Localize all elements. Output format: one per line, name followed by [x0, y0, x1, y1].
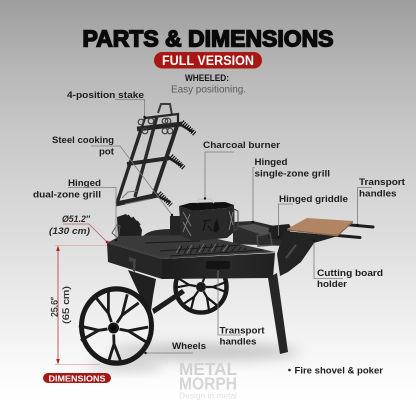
ground shadow: [87, 343, 300, 370]
height dimension: (65 cm): [60, 286, 71, 324]
label: diameter dimension: (130 cm): [49, 225, 90, 236]
badge: full version: FULL VERSION: [162, 53, 254, 68]
label: 4-position stake: [67, 89, 146, 118]
rear single-zone grill: [233, 221, 287, 246]
cutting board: [286, 218, 373, 258]
body logo: [129, 257, 136, 272]
watermark logo: METAL: [179, 359, 237, 379]
grill body: [106, 235, 275, 279]
label: hinged griddle: Hinged griddle: [279, 193, 348, 204]
front handle recess: [206, 261, 230, 269]
charcoal burner: [179, 199, 238, 241]
watermark logo: MORPH: [179, 374, 237, 394]
title: PARTS & DIMENSIONS: [82, 26, 334, 52]
label: charcoal burner: [203, 139, 280, 200]
label: hinged dual-zone grill: Hinged: [68, 177, 101, 188]
subtitle: wheeled: Easy positioning.: [171, 84, 246, 96]
label: charcoal burner: Charcoal burner: [203, 139, 280, 150]
subtitle: wheeled: [171, 73, 246, 96]
grate: [145, 241, 264, 256]
label: steel cooking pot: Steel cooking: [52, 134, 114, 145]
badge: dimensions: DIMENSIONS: [48, 374, 106, 383]
burner logo: [203, 220, 219, 232]
label: hinged dual-zone grill: [33, 177, 117, 241]
front wheel: [79, 289, 152, 364]
right leg: [268, 273, 288, 354]
label: transport handles bottom: Transport: [220, 324, 264, 335]
label: cutting board holder: holder: [317, 278, 347, 289]
label: transport handles right: handles: [359, 187, 396, 198]
label: diameter dimension: [49, 213, 108, 243]
height dimension: 25.6″: [48, 296, 60, 317]
cutting board holder: [277, 231, 338, 276]
label: hinged griddle: [277, 193, 348, 238]
label: cutting board holder: Cutting board: [317, 267, 383, 278]
griddle: [257, 224, 292, 246]
hinged dual-zone grill: [112, 214, 184, 240]
label: hinged single-zone grill: single-zone grill: [254, 168, 330, 179]
label: transport handles bottom: [217, 268, 264, 346]
height dimension: [48, 246, 107, 364]
label: wheels: [144, 340, 206, 354]
badge: dimensions: [43, 373, 111, 383]
label: transport handles right: [356, 176, 405, 226]
label: hinged single-zone grill: [252, 156, 330, 223]
label: transport handles right: Transport: [359, 176, 405, 187]
note: fire shovel and poker: Fire shovel & poker: [294, 364, 383, 375]
rack: 4-position stake: [116, 104, 195, 205]
label: 4-position stake: 4-position stake: [67, 89, 144, 100]
label: wheels: Wheels: [172, 340, 206, 351]
label: transport handles bottom: handles: [220, 336, 256, 346]
rear wheel: [152, 262, 226, 314]
watermark logo: [179, 359, 237, 400]
label: hinged dual-zone grill: dual-zone grill: [33, 188, 101, 200]
label: steel cooking pot: [52, 134, 173, 216]
label: cutting board holder: [313, 240, 383, 289]
watermark logo: Design in metal: [179, 392, 237, 400]
label: steel cooking pot: pot: [99, 145, 114, 156]
label: hinged single-zone grill: Hinged: [254, 156, 288, 167]
left leg: [128, 270, 156, 311]
label: diameter dimension: Ø51.2″: [62, 213, 90, 224]
subtitle: wheeled: WHEELED:: [185, 73, 229, 83]
